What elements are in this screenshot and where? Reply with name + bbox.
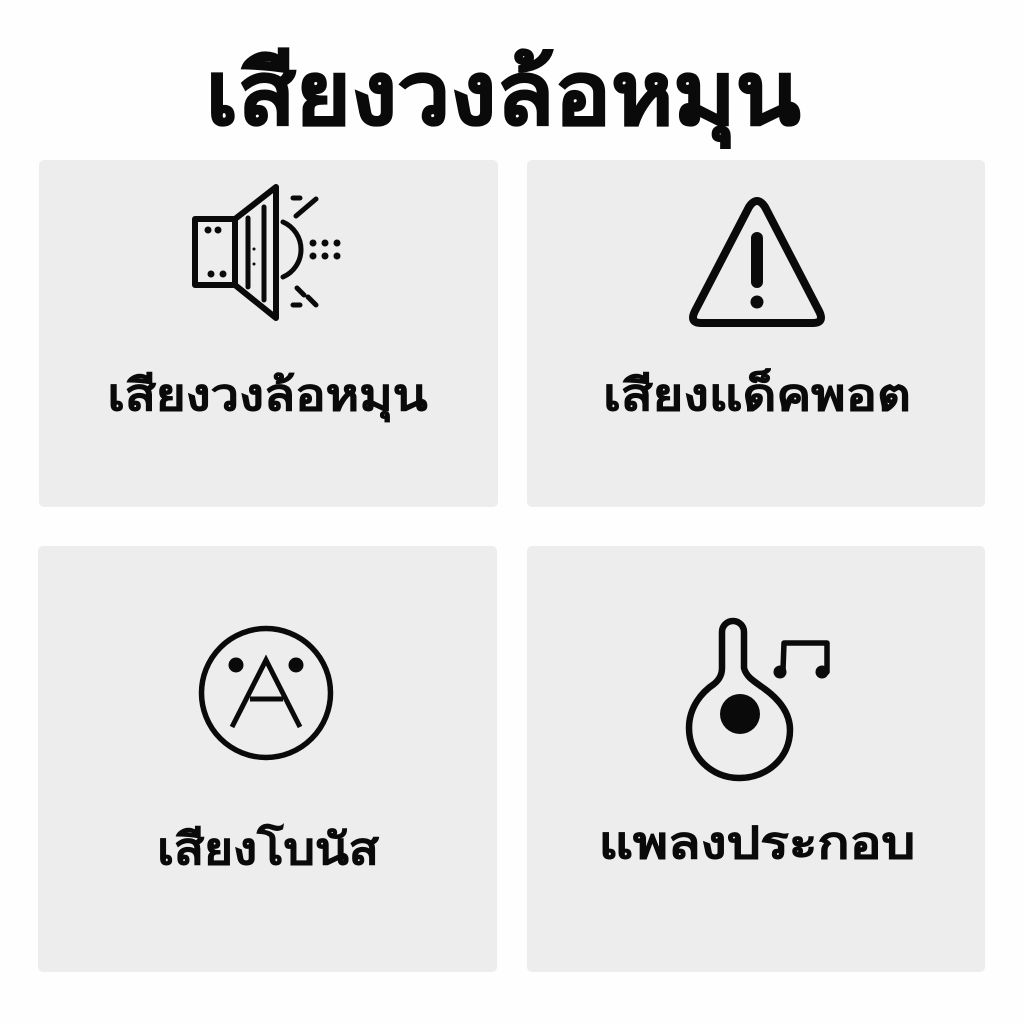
panel: top left (39, 160, 498, 507)
label: background music: แพลงประกอบ (599, 819, 915, 868)
icon: warning triangle (689, 197, 825, 327)
label: jackpot sound: เสียงแด็คพอต (603, 371, 911, 420)
panel: bottom right (527, 546, 985, 972)
panel: bottom left (38, 546, 497, 972)
icon: letter A in circle (198, 626, 334, 760)
icon: lute and music note (686, 618, 830, 782)
label: wheel sound: เสียงวงล้อหมุน (107, 371, 427, 420)
icon: speaker (192, 184, 340, 321)
label: bonus sound: เสียงโบนัส (157, 825, 379, 874)
panel: top right (527, 160, 985, 507)
title: เสียงวงล้อหมุน (206, 44, 800, 143)
